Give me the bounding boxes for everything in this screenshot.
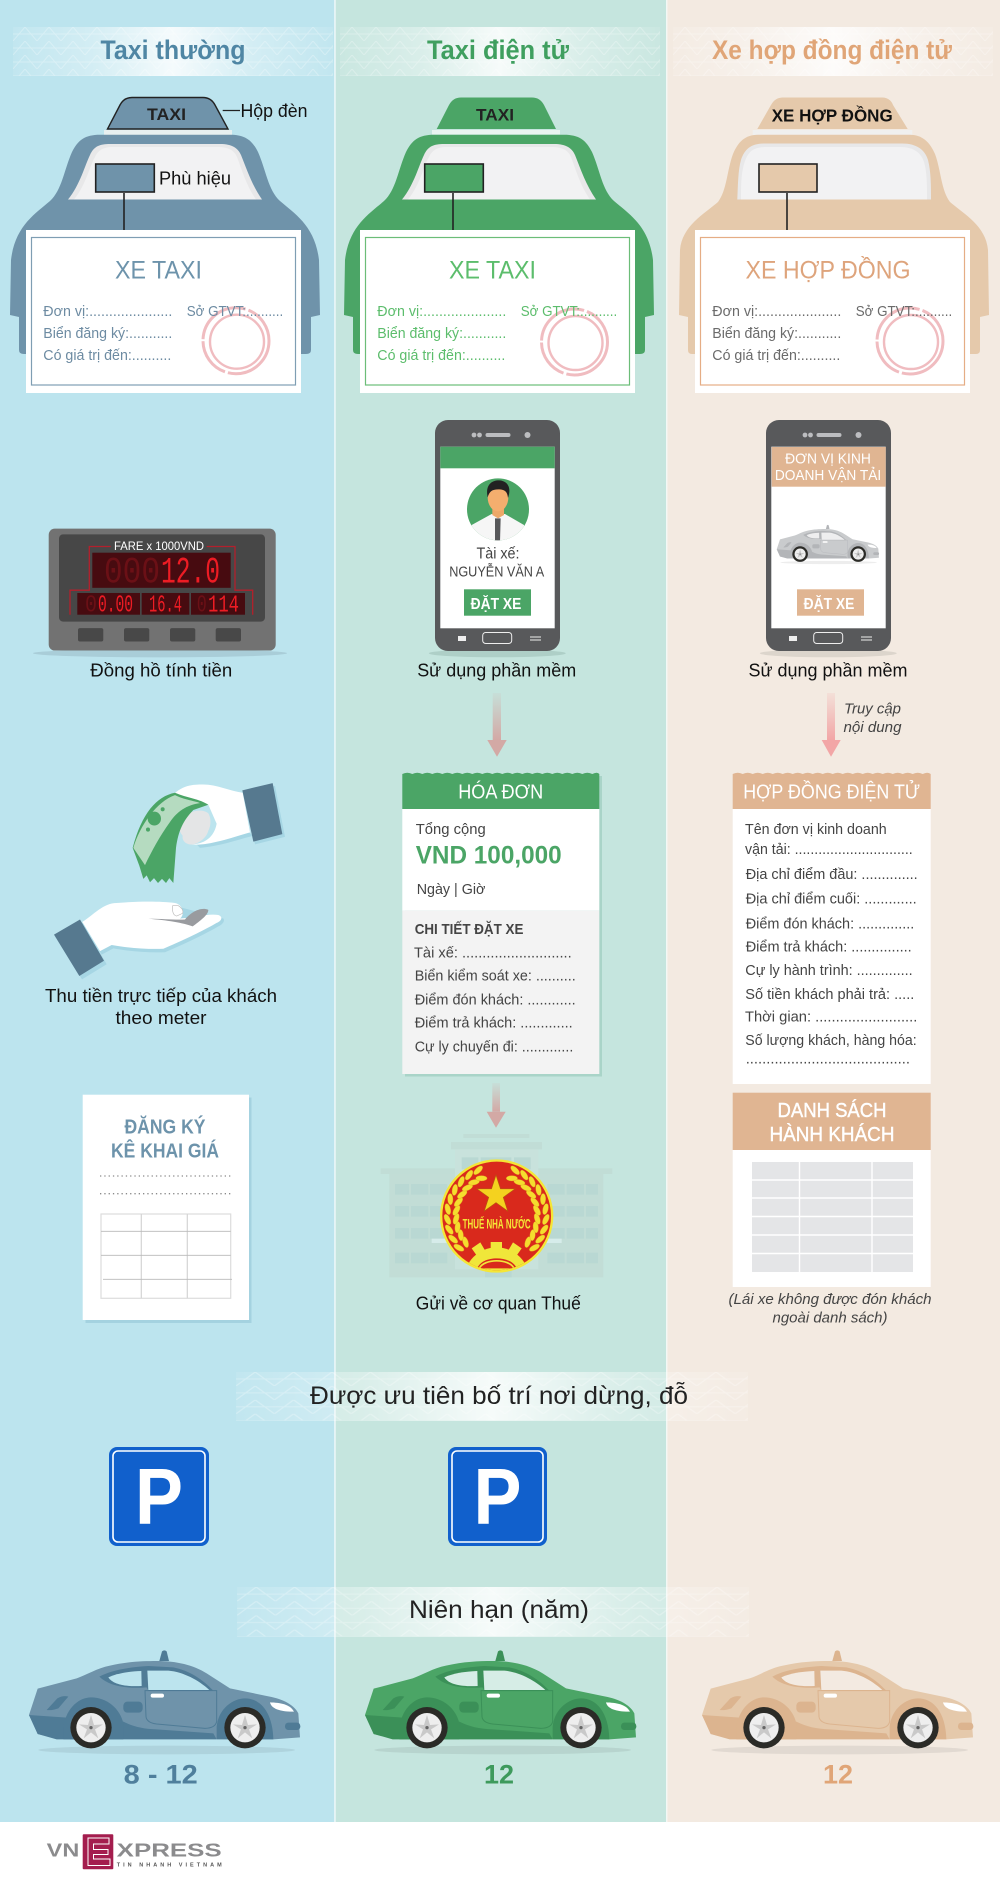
icon: taximeter: 0.00	[98, 593, 133, 620]
phone: driver app: ĐẶT XE	[471, 596, 521, 613]
document: passenger list	[733, 1093, 931, 1287]
badge card: XE TAXI: Biển đăng ký:...........	[377, 326, 506, 342]
receipt: invoice: Ngày | Giờ	[417, 881, 486, 898]
illustration: contract car front view	[679, 98, 989, 354]
badge card: XE TAXI	[360, 230, 635, 393]
icon: gray car in app	[777, 525, 879, 564]
illustration: taxi front view with badge	[10, 98, 320, 354]
note: passenger list rule: ngoài danh sách)	[772, 1311, 888, 1327]
heading: Taxi điện tử: Taxi điện tử	[427, 35, 569, 65]
caption: direct payment	[45, 986, 277, 1028]
illustration: taxi front view with badge: TAXI	[147, 105, 186, 124]
arrow: invoice to tax office	[487, 1083, 506, 1128]
icon: driver avatar	[467, 478, 529, 543]
icon: taximeter: 16.4	[149, 593, 182, 620]
heading: parking priority: Được ưu tiên bố trí nơi dừng, đỗ	[310, 1381, 688, 1410]
receipt: invoice: Biển kiểm soát xe: ..........	[415, 968, 576, 985]
badge card: XE TAXI: XE TAXI	[449, 257, 536, 285]
badge card: XE TAXI: Biển đăng ký:...........	[43, 326, 172, 342]
document: fare registration: KÊ KHAI GIÁ	[111, 1138, 219, 1162]
illustration: taxi front view with badge: Phù hiệu	[159, 168, 231, 188]
document: e-contract: Số lượng khách, hàng hóa:	[745, 1032, 917, 1049]
document: e-contract: Số tiền khách phải trả: .....	[745, 986, 914, 1003]
badge card: XE TAXI: Sở GTVT:..........	[521, 304, 617, 320]
arrow: app to invoice	[487, 693, 507, 757]
receipt: invoice: Điểm trả khách: .............	[415, 1015, 573, 1032]
phone: contract app: DOANH VẬN TẢI	[775, 467, 881, 484]
badge card: XE HỢP ĐỒNG: Có giá trị đến:..........	[712, 348, 840, 364]
logo: VnExpress: VN	[47, 1841, 79, 1861]
icon: tax office building with emblem	[395, 1158, 598, 1278]
document: e-contract: Điểm đón khách: ..............	[746, 915, 914, 932]
badge card: XE HỢP ĐỒNG	[695, 230, 970, 393]
icon: taximeter	[33, 529, 287, 657]
badge card: XE TAXI: XE TAXI	[115, 257, 202, 285]
document: e-contract: Địa chỉ điểm cuối: .............	[746, 890, 917, 907]
note: passenger list rule: (Lái xe không được đón khách	[728, 1292, 932, 1308]
illustration: taxi front view	[344, 98, 654, 354]
receipt: invoice: Cự ly chuyến đi: .............	[415, 1039, 573, 1056]
document: fare registration	[83, 1095, 252, 1323]
panel: Xe hợp đồng điện tử	[667, 0, 1000, 1822]
document: e-contract: HỢP ĐỒNG ĐIỆN TỬ	[743, 779, 920, 803]
badge card: XE HỢP ĐỒNG: XE HỢP ĐỒNG	[746, 255, 910, 285]
document: e-contract: ........................................	[746, 1050, 910, 1067]
car: regular taxi	[29, 1650, 300, 1754]
document: e-contract: Địa chỉ điểm đầu: ..............	[746, 866, 918, 883]
badge card: XE HỢP ĐỒNG: Đơn vị:.....................	[712, 304, 841, 320]
document: e-contract: Điểm trả khách: ...............	[746, 939, 912, 956]
icon: hands exchanging cash	[54, 783, 285, 979]
icon: taximeter: 0	[85, 593, 97, 620]
band: Xe hợp đồng heading	[673, 27, 993, 76]
receipt: invoice: Tài xế: ...........................	[414, 944, 572, 961]
caption: tax office: Gửi về cơ quan Thuế	[416, 1293, 581, 1313]
icon: taximeter: 0	[197, 593, 207, 620]
panel: Taxi điện tử	[336, 0, 666, 1822]
document: e-contract: vận tải: ..............................	[745, 841, 913, 858]
document: e-contract: Tên đơn vị kinh doanh	[745, 821, 887, 838]
phone: contract app: ĐẶT XE	[804, 596, 854, 613]
badge card: XE TAXI: Sở GTVT:..........	[187, 304, 283, 320]
receipt: invoice: CHI TIẾT ĐẶT XE	[415, 921, 523, 938]
badge card: XE TAXI: Đơn vị:.....................	[377, 304, 506, 320]
logo: VnExpress	[47, 1834, 222, 1869]
document: passenger list: HÀNH KHÁCH	[770, 1123, 894, 1146]
band: Taxi thường heading	[13, 27, 333, 76]
receipt: invoice: Điểm đón khách: ............	[415, 992, 576, 1009]
logo: VnExpress: TIN NHANH VIETNAM	[117, 1863, 222, 1869]
band: lifespan heading	[237, 1587, 749, 1637]
heading: Xe hợp đồng điện tử: Xe hợp đồng điện tử	[712, 35, 952, 65]
caption: app: Sử dụng phần mềm	[417, 661, 576, 681]
logo: VnExpress: XPRESS	[117, 1841, 222, 1861]
caption: taximeter: Đồng hồ tính tiền	[90, 661, 232, 681]
divider	[334, 0, 336, 1822]
arrow: app to contract: nội dung	[844, 719, 902, 736]
badge card: XE TAXI	[26, 230, 301, 393]
icon: taximeter: FARE x 1000VND	[114, 540, 204, 553]
parking sign: regular taxi: P	[135, 1452, 183, 1541]
receipt: invoice: VND 100,000	[416, 841, 562, 869]
arrow: app to contract	[822, 693, 902, 757]
illustration: contract car front view: XE HỢP ĐỒNG	[772, 105, 893, 126]
footer	[0, 1822, 1000, 1882]
badge card: XE TAXI: Có giá trị đến:..........	[377, 348, 505, 364]
parking sign: e-taxi	[448, 1447, 547, 1546]
illustration: taxi front view: TAXI	[476, 106, 514, 125]
caption: direct payment: theo meter	[116, 1008, 207, 1028]
badge card: XE HỢP ĐỒNG: Biển đăng ký:...........	[712, 326, 841, 342]
phone: driver app: Tài xế:	[476, 546, 520, 563]
icon: taximeter: 12.0	[161, 552, 220, 594]
emblem: tax authority: THUẾ NHÀ NƯỚC	[463, 1214, 531, 1231]
caption: direct payment: Thu tiền trực tiếp của khách	[45, 986, 277, 1006]
phone: driver app: NGUYỄN VĂN A	[449, 564, 544, 581]
car: contract car	[702, 1650, 973, 1754]
parking sign: regular taxi	[109, 1447, 209, 1546]
document: e-contract: Cự ly hành trình: ..............	[745, 962, 913, 979]
heading: lifespan: Niên hạn (năm)	[409, 1596, 589, 1624]
parking sign: e-taxi: P	[474, 1452, 522, 1541]
car: e-taxi	[365, 1650, 636, 1754]
badge card: XE TAXI: Có giá trị đến:..........	[43, 348, 171, 364]
badge card: XE TAXI: Đơn vị:.....................	[43, 304, 172, 320]
badge card: XE HỢP ĐỒNG: Sở GTVT:..........	[856, 304, 952, 320]
caption: app: Sử dụng phần mềm	[748, 661, 908, 681]
lifespan: e-taxi: 12	[484, 1759, 514, 1789]
band: parking priority heading	[236, 1372, 748, 1421]
phone: contract app	[760, 420, 897, 657]
icon: taximeter: 114	[208, 593, 239, 620]
arrow: app to contract: Truy cập	[844, 700, 901, 717]
note: passenger list rule	[728, 1292, 932, 1327]
panel: Taxi thường	[0, 0, 334, 1822]
receipt: invoice: HÓA ĐƠN	[458, 780, 543, 803]
document: e-contract: Thời gian: .........................	[745, 1009, 917, 1026]
illustration: taxi front view with badge: Hộp đèn	[240, 101, 308, 121]
receipt: invoice	[402, 773, 602, 1076]
document: fare registration: ĐĂNG KÝ	[124, 1114, 206, 1138]
lifespan: regular taxi: 8 - 12	[124, 1759, 198, 1789]
phone: contract app: ĐƠN VỊ KINH	[785, 450, 871, 467]
document: e-contract	[733, 773, 931, 1084]
lifespan: contract car: 12	[823, 1759, 853, 1789]
document: passenger list: DANH SÁCH	[778, 1099, 886, 1122]
receipt: invoice: Tổng cộng	[416, 821, 486, 838]
band: Taxi điện tử heading	[340, 27, 660, 76]
phone: driver app	[429, 420, 566, 657]
heading: Taxi thường: Taxi thường	[100, 35, 246, 65]
icon: taximeter: 000	[104, 552, 160, 594]
divider	[666, 0, 667, 1822]
emblem: tax authority	[440, 1159, 554, 1273]
